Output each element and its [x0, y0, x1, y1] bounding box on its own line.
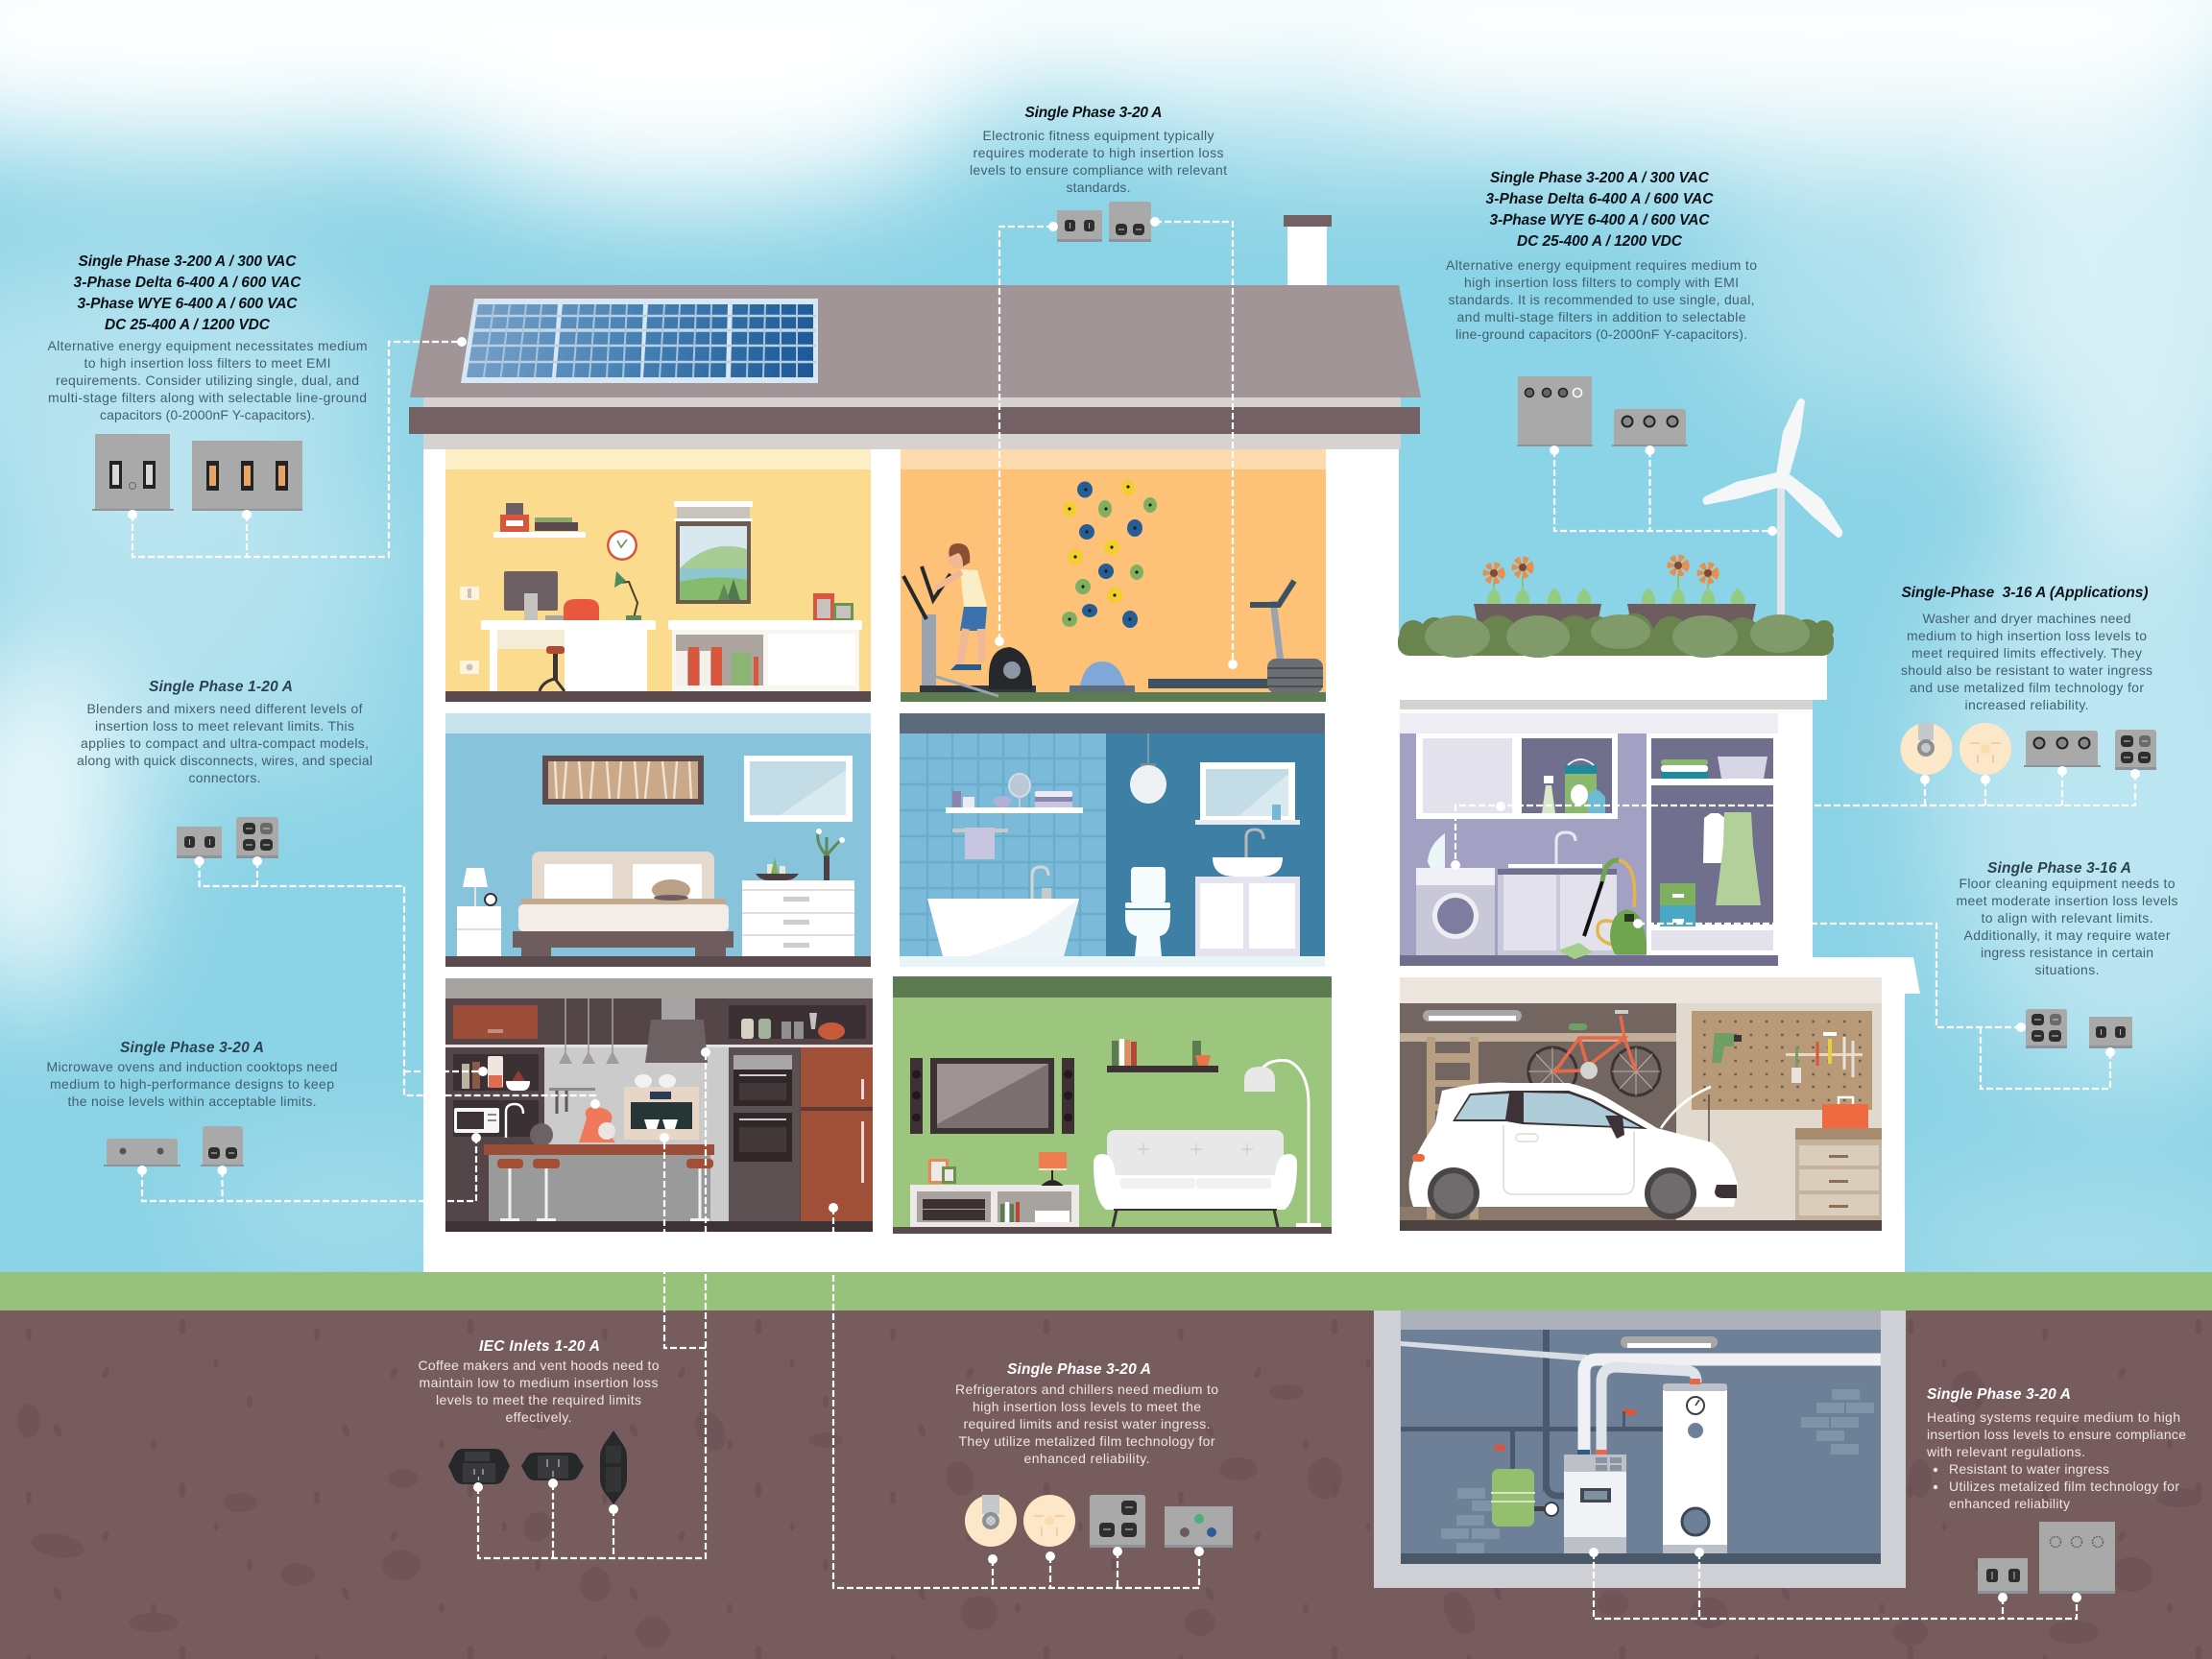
text: washer and dryer: increased reliability. [1964, 697, 2089, 712]
wall sockets [460, 587, 479, 674]
text: microwave ovens [46, 1040, 338, 1109]
pegboard with tools [1692, 1011, 1872, 1110]
text: washer and dryer: meet required limits effectively. They [1911, 645, 2142, 661]
text: IEC inlets: effectively. [505, 1409, 572, 1425]
furnace [1564, 1450, 1626, 1553]
text: wind alternative energy: high insertion loss filters to comply with EMI [1464, 275, 1739, 290]
drawers [1795, 1128, 1882, 1220]
bicycle [1528, 1012, 1660, 1095]
ladder [1427, 1037, 1479, 1219]
text: heating systems: insertion loss levels to ensure compliance [1927, 1427, 2186, 1442]
toilet [1125, 867, 1170, 956]
text: microwave ovens: medium to high-performance designs to keep [50, 1076, 334, 1092]
text: heating systems: Heating systems require medium to high [1927, 1409, 2180, 1425]
treadmill and weights [1148, 581, 1323, 693]
bed [513, 852, 733, 956]
text: floor cleaning [1957, 860, 2177, 977]
text: heating systems: Single Phase 3-20 A [1927, 1386, 2071, 1403]
text: solar alternative energy: Single Phase 3-200 A / 300 VAC [79, 253, 297, 270]
band above laundry [1400, 700, 1813, 709]
vacuum cleaner [1558, 860, 1647, 959]
car [1409, 1083, 1738, 1219]
coffee machine [624, 1074, 699, 1140]
filters: floor cleaning [2026, 1009, 2132, 1048]
towel rail [952, 828, 1008, 859]
wall shelf [946, 774, 1083, 813]
text: blenders and mixers: Single Phase 1-20 A [149, 679, 293, 695]
pendant lamp [1130, 733, 1166, 804]
sofa [1094, 1130, 1297, 1227]
island and stools [484, 1144, 714, 1221]
rail and mixer [549, 1088, 615, 1142]
filters: heating [1978, 1522, 2115, 1594]
bricks [1441, 1389, 1874, 1553]
text: solar alternative energy: Alternative energy equipment necessitates medium [48, 338, 367, 353]
text: washer and dryer: and use metalized film technology for [1910, 680, 2144, 695]
pipes [1401, 1330, 1663, 1496]
text: refrigerators: Refrigerators and chillers need medium to [955, 1382, 1218, 1397]
ground: grass [0, 1272, 2212, 1310]
window [674, 501, 753, 604]
text: fitness equipment: Single Phase 3-20 A [1025, 105, 1162, 121]
clock [607, 530, 637, 561]
vanity mirror [1195, 762, 1300, 825]
text: microwave ovens: the noise levels within acceptable limits. [67, 1094, 317, 1109]
text: floor cleaning: to align with relevant limits. [1982, 910, 2152, 926]
text: blenders and mixers: along with quick disconnects, wires, and special [77, 753, 373, 768]
roof [409, 285, 1421, 449]
chimney [1284, 215, 1332, 289]
text: refrigerators: Single Phase 3-20 A [1007, 1361, 1151, 1378]
filters: refrigerators [965, 1495, 1233, 1548]
room: living room [893, 976, 1332, 1234]
text: solar alternative energy: DC 25-400 A / 1200 VDC [105, 317, 271, 333]
sky background [0, 0, 2212, 1306]
text: solar alternative energy: 3-Phase WYE 6-400 A / 600 VAC [77, 296, 298, 312]
text: microwave ovens: Microwave ovens and induction cooktops need [46, 1059, 338, 1074]
text: washer and dryer: Single-Phase 3-16 A (Applications) [1901, 585, 2149, 601]
text: wind alternative energy [1446, 170, 1757, 342]
hood and pendant lights [559, 998, 708, 1064]
dresser [742, 829, 854, 956]
toolbox [1822, 1097, 1868, 1128]
text: fitness equipment: standards. [1066, 180, 1131, 195]
ducts [1401, 1341, 1881, 1455]
text: fitness equipment: levels to ensure compliance with relevant [970, 162, 1227, 178]
IEC inlets [448, 1431, 627, 1504]
text: solar alternative energy: capacitors (0-2000nF Y-capacitors). [100, 407, 315, 422]
room: office [445, 449, 871, 702]
text: wind alternative energy: and multi-stage filters in addition to selectable [1457, 309, 1746, 325]
mirror [744, 756, 853, 822]
text: wind alternative energy: line-ground capacitors (0-2000nF Y-capacitors). [1455, 326, 1747, 342]
room: basement [1374, 1310, 1906, 1588]
text: microwave ovens: Single Phase 3-20 A [120, 1040, 264, 1056]
text: IEC inlets: IEC Inlets 1-20 A [479, 1338, 600, 1355]
sink cabinet [1498, 832, 1617, 955]
filters: blenders [177, 817, 278, 858]
nightstand and lamp [457, 868, 501, 956]
wardrobe [1647, 733, 1778, 955]
text: floor cleaning: Additionally, it may require water [1964, 927, 2171, 943]
text: fitness equipment: requires moderate to high insertion loss [974, 145, 1223, 160]
desk and computer [481, 571, 656, 691]
filters: washer and dryer [1901, 723, 2156, 775]
room: kitchen [445, 978, 873, 1232]
text: refrigerators [955, 1361, 1218, 1466]
text: wind alternative energy: standards. It is recommended to use single, dual, [1448, 292, 1755, 307]
text: refrigerators: high insertion loss levels to meet the [973, 1399, 1201, 1414]
cabinet with binders [668, 593, 862, 691]
text: refrigerators: required limits and resist water ingress. [964, 1416, 1210, 1431]
text: blenders and mixers [77, 679, 373, 785]
text: blenders and mixers: connectors. [188, 770, 261, 785]
ovens [729, 1047, 800, 1221]
ceiling light [1621, 1336, 1718, 1348]
text: heating systems: Resistant to water ingress [1949, 1461, 2109, 1477]
upper cabinets [453, 1005, 866, 1040]
room: laundry [1400, 713, 1778, 966]
wind turbine [1703, 398, 1842, 624]
text: washer and dryer [1901, 585, 2152, 712]
text: solar alternative energy: requirements. Consider utilizing single, dual, and [56, 373, 359, 388]
ceiling light [1423, 1010, 1522, 1022]
picture [542, 756, 704, 805]
device sets [92, 202, 2156, 1594]
house white walls [423, 434, 1920, 1279]
sink and cabinet [1195, 830, 1300, 956]
room: gym [901, 449, 1326, 702]
text: wind alternative energy: DC 25-400 A / 1200 VDC [1517, 233, 1683, 250]
filters: fitness [1057, 202, 1151, 242]
connector lines and dots [128, 217, 2140, 1619]
fridge [801, 1047, 873, 1221]
ground: soil [0, 1306, 2212, 1659]
text: heating systems [1926, 1386, 2186, 1511]
climbing holds [1062, 480, 1157, 628]
microwave and tap [454, 1104, 553, 1146]
table lamp and frames [928, 1152, 1067, 1185]
text: refrigerators: enhanced reliability. [1023, 1451, 1150, 1466]
TV unit [910, 1185, 1079, 1227]
text: wind alternative energy: 3-Phase WYE 6-400 A / 600 VAC [1490, 212, 1710, 228]
text: fitness equipment [970, 105, 1227, 195]
room: bedroom [445, 713, 871, 967]
text: solar alternative energy: to high insertion loss filters to meet EMI [84, 355, 330, 371]
text: heating systems: with relevant regulations. [1926, 1444, 2085, 1459]
text: refrigerators: They utilize metalized film technology for [958, 1433, 1215, 1449]
text: washer and dryer: medium to high insertion loss levels to [1907, 628, 2147, 643]
room: garage [1400, 977, 1882, 1231]
text: floor cleaning: Floor cleaning equipment needs to [1959, 876, 2176, 891]
text: IEC inlets: Coffee makers and vent hoods need to [419, 1358, 660, 1373]
text: solar alternative energy [48, 253, 367, 422]
text: IEC inlets: levels to meet the required limits [436, 1392, 641, 1407]
solar panels [461, 299, 818, 383]
water heater [1663, 1379, 1727, 1553]
television and speakers [910, 1058, 1074, 1134]
text: solar alternative energy: multi-stage filters along with selectable line-ground [48, 390, 367, 405]
text: floor cleaning: situations. [2035, 962, 2099, 977]
text: floor cleaning: ingress resistance in certain [1981, 945, 2153, 960]
floor lamp [1244, 1060, 1321, 1227]
text: heating systems: enhanced reliability [1949, 1496, 2070, 1511]
text: floor cleaning: meet moderate insertion loss levels [1957, 893, 2177, 908]
text: solar alternative energy: 3-Phase Delta 6-400 A / 600 VAC [73, 275, 301, 291]
green expansion tank [1491, 1469, 1558, 1527]
wall shelf with books [493, 503, 586, 538]
planters and flowers [1474, 559, 1756, 634]
hedge [1398, 613, 1834, 658]
bathtub [927, 867, 1079, 956]
balance dome [1070, 661, 1135, 692]
text: blenders and mixers: applies to compact and ultra-compact models, [81, 735, 369, 751]
text: blenders and mixers: insertion loss to meet relevant limits. This [95, 718, 354, 733]
text: blenders and mixers: Blenders and mixers need different levels of [86, 701, 363, 716]
text: floor cleaning: Single Phase 3-16 A [1987, 860, 2131, 877]
room: bathroom [900, 713, 1325, 967]
filters: microwave [104, 1126, 244, 1166]
text: IEC inlets: maintain low to medium insertion loss [419, 1375, 659, 1390]
text: IEC inlets [419, 1338, 660, 1425]
washing machine [1416, 833, 1495, 955]
text: wind alternative energy: Single Phase 3-200 A / 300 VAC [1490, 170, 1710, 186]
bookshelf [1107, 1039, 1218, 1072]
left niche with blender [453, 1054, 539, 1137]
text: wind alternative energy: 3-Phase Delta 6-400 A / 600 VAC [1486, 191, 1714, 207]
elliptical trainer with person [903, 543, 1036, 696]
text: fitness equipment: Electronic fitness equipment typically [983, 128, 1214, 143]
text: heating systems: Utilizes metalized film technology for [1949, 1479, 2179, 1494]
terrace with plants [1398, 398, 1842, 658]
upper cabinet [1416, 733, 1618, 819]
filters: left alternative energy [92, 434, 302, 511]
text: washer and dryer: should also be resistant to water ingress [1901, 662, 2152, 678]
text: washer and dryer: Washer and dryer machines need [1922, 611, 2131, 626]
text: wind alternative energy: Alternative energy equipment requires medium to [1446, 257, 1757, 273]
filters: right alternative energy [1517, 376, 1688, 446]
